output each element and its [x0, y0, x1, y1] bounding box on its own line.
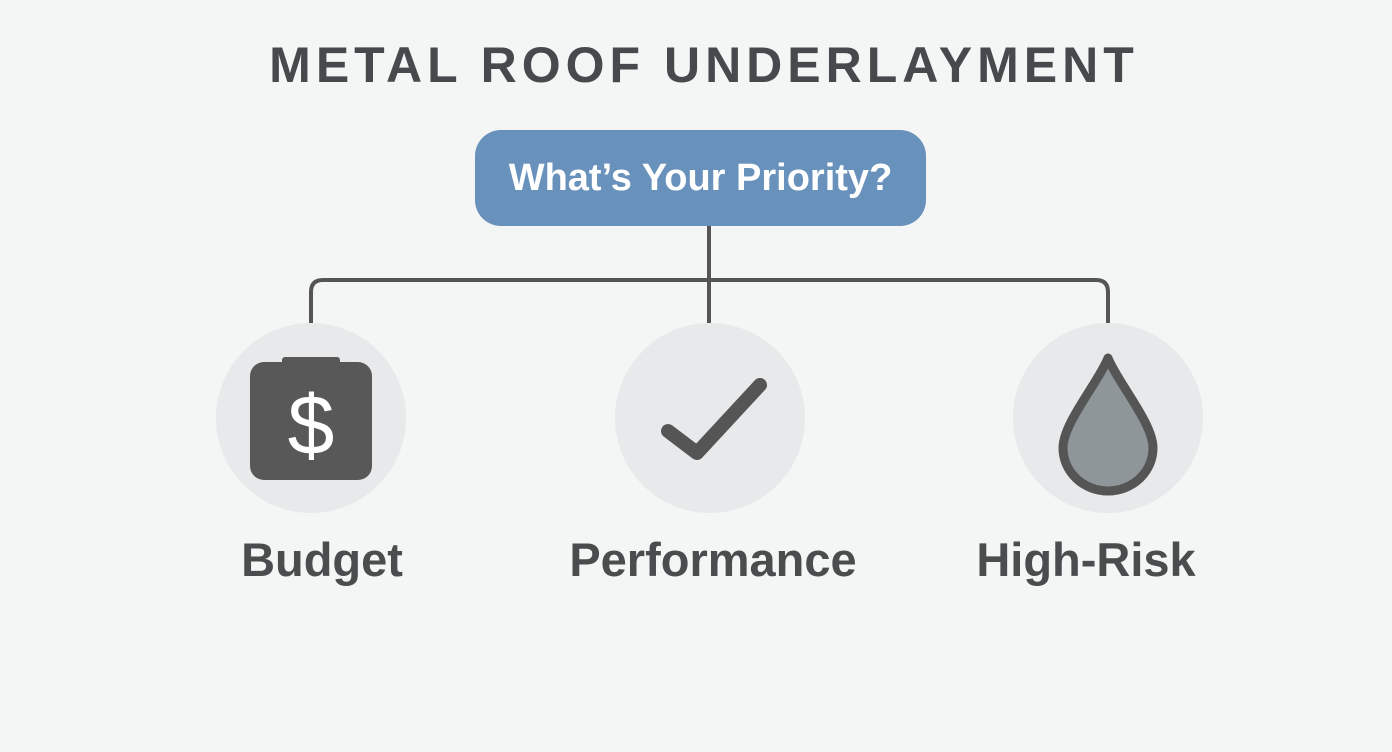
title: METAL ROOF UNDERLAYMENT	[269, 37, 1139, 93]
label: budget: Budget	[241, 533, 403, 586]
question box	[475, 130, 926, 226]
label: performance: Performance	[569, 533, 857, 586]
icon: performance	[615, 323, 805, 513]
icon: budget: $	[288, 378, 334, 472]
icon: budget	[216, 323, 406, 513]
label: high-risk: High-Risk	[976, 533, 1196, 586]
question box: What’s Your Priority?	[509, 157, 892, 199]
icon: high-risk drop	[1013, 323, 1203, 513]
